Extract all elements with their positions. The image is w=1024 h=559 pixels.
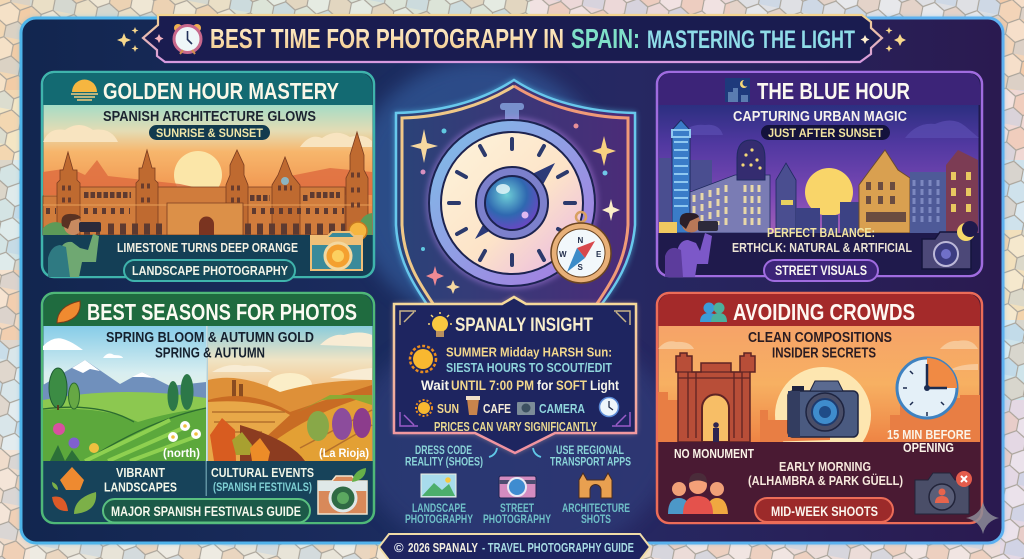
illustration: spring landscape bbox=[43, 326, 206, 461]
icon: compass: S bbox=[578, 263, 584, 272]
icon: compass: E bbox=[596, 250, 602, 259]
tag: mid-week shoots bbox=[755, 498, 893, 522]
icon row: CAFE bbox=[483, 401, 511, 416]
label: no monument: NO MONUMENT bbox=[674, 447, 754, 461]
subtitle: SPRING & AUTUMN bbox=[155, 346, 265, 362]
tag: landscape photography: LANDSCAPE PHOTOGRAPHY bbox=[132, 263, 288, 278]
tag: just after sunset: JUST AFTER SUNSET bbox=[768, 126, 884, 140]
subtitle: CAPTURING URBAN MAGIC bbox=[733, 109, 907, 125]
tip: regional transport: USE REGIONAL bbox=[556, 445, 624, 457]
subtitle bbox=[106, 330, 314, 362]
icon: right sparkles bbox=[860, 27, 906, 52]
band bbox=[44, 235, 372, 276]
heading: AVOIDING CROWDS bbox=[733, 299, 915, 325]
subtitle bbox=[748, 330, 892, 362]
icon: night skyline bbox=[725, 78, 750, 102]
text: wait until bbox=[421, 378, 619, 393]
header band bbox=[658, 294, 980, 326]
icon row: CAMERA bbox=[539, 401, 585, 416]
icon: large camera bbox=[788, 381, 858, 437]
illustration: triumphal arch bbox=[676, 353, 755, 442]
header band bbox=[44, 294, 372, 326]
title banner: SPAIN: bbox=[571, 23, 640, 54]
title text: BEST TIME FOR PHOTOGRAPHY IN bbox=[210, 23, 564, 54]
corner ornaments bbox=[400, 311, 630, 426]
icon: grey sparkle bbox=[966, 502, 999, 534]
header band bbox=[44, 73, 372, 105]
icon: camera with leaf bbox=[318, 468, 367, 514]
label: street photography: PHOTOGRAPHY bbox=[483, 514, 551, 526]
panel: avoiding crowds bbox=[657, 293, 999, 534]
icon: compass bbox=[551, 212, 611, 283]
icon: left sparkles bbox=[117, 27, 164, 52]
icon: photographer bbox=[48, 214, 101, 277]
caption: perfect balance: ERTHCLK: NATURAL & ARTIFICIAL bbox=[732, 241, 912, 255]
footer plaque: - TRAVEL PHOTOGRAPHY GUIDE bbox=[482, 540, 634, 555]
tag: mid-week shoots: MID-WEEK SHOOTS bbox=[771, 504, 878, 519]
illustration: city at dusk bbox=[658, 105, 979, 233]
icon: setting sun bbox=[71, 79, 98, 100]
caption: perfect balance bbox=[732, 226, 912, 255]
text: wait until: for bbox=[537, 378, 554, 393]
panel: best seasons for photos bbox=[42, 293, 374, 523]
label: street photography bbox=[483, 503, 551, 526]
icon: clock fifteen minutes bbox=[897, 358, 957, 418]
icon: group of people bbox=[668, 473, 728, 514]
title banner bbox=[117, 15, 906, 62]
tag: festivals guide: MAJOR SPANISH FESTIVALS GUIDE bbox=[111, 504, 301, 519]
text: prices: PRICES CAN VARY SIGNIFICANTLY bbox=[434, 420, 598, 434]
caption: LIMESTONE TURNS DEEP ORANGE bbox=[117, 240, 298, 255]
tag: street visuals: STREET VISUALS bbox=[775, 263, 867, 278]
illustration: palace at sunset bbox=[43, 105, 372, 235]
icon row bbox=[416, 396, 618, 416]
subtitle: CLEAN COMPOSITIONS bbox=[748, 330, 892, 346]
icon row: SUN bbox=[437, 401, 459, 416]
tag: sunrise and sunset: SUNRISE & SUNSET bbox=[156, 126, 264, 140]
icon: sun bbox=[410, 346, 436, 372]
text: early morning: EARLY MORNING bbox=[779, 460, 871, 474]
text: siesta hours: SIESTA HOURS TO SCOUT/EDIT bbox=[446, 360, 612, 375]
text: early morning bbox=[748, 460, 903, 488]
text: summer midday: SUMMER Midday HARSH Sun: bbox=[446, 344, 612, 360]
label: 15 min before opening: 15 MIN BEFORE bbox=[887, 427, 971, 442]
footer plaque bbox=[379, 534, 650, 559]
icon: camera with moon bbox=[922, 221, 978, 269]
footer plaque: 2026 SPANALY bbox=[408, 540, 478, 555]
label: street photography: STREET bbox=[500, 503, 534, 515]
text: wait until: SOFT bbox=[556, 378, 588, 393]
icon: leaves bbox=[52, 467, 96, 514]
icon: two people bbox=[700, 302, 727, 322]
icon: architecture bbox=[579, 473, 612, 498]
band bbox=[658, 233, 980, 275]
text: cultural events bbox=[211, 465, 314, 494]
icon: photographer bbox=[665, 213, 718, 277]
header band bbox=[658, 73, 980, 105]
icon: compass: N bbox=[578, 236, 584, 245]
text: wait until: UNTIL 7:00 PM bbox=[451, 378, 534, 393]
text: vibrant landscapes bbox=[104, 465, 177, 494]
heading: BEST SEASONS FOR PHOTOS bbox=[87, 299, 357, 325]
icon: shield sparkles bbox=[410, 124, 620, 294]
icon: compass: W bbox=[559, 250, 567, 259]
text: wait until: Light bbox=[590, 378, 619, 393]
label: landscape photography: LANDSCAPE bbox=[412, 503, 466, 515]
subtitle: INSIDER SECRETS bbox=[772, 346, 876, 362]
tip: dress code: DRESS CODE bbox=[415, 445, 472, 457]
tag: festivals guide bbox=[103, 499, 310, 522]
title banner: MASTERING THE LIGHT bbox=[647, 26, 855, 54]
band bbox=[44, 461, 372, 522]
label: la rioja: (La Rioja) bbox=[319, 446, 369, 460]
tip: dress code bbox=[405, 445, 483, 468]
icon: alarm clock bbox=[174, 24, 201, 54]
tag: street visuals bbox=[764, 260, 878, 281]
text: wait until: Wait bbox=[421, 378, 449, 393]
label: architecture shots: ARCHITECTURE bbox=[562, 503, 630, 515]
panel: spanaly insight bbox=[394, 297, 636, 453]
label: 15 min before opening: OPENING bbox=[903, 440, 954, 455]
icon: stopwatch bbox=[426, 103, 598, 289]
icon: autumn leaf bbox=[57, 301, 80, 323]
subtitle: SPANISH ARCHITECTURE GLOWS bbox=[103, 109, 316, 125]
text: vibrant landscapes: LANDSCAPES bbox=[104, 480, 177, 494]
illustration: autumn landscape bbox=[208, 326, 372, 461]
label: architecture shots bbox=[562, 503, 630, 526]
heading: GOLDEN HOUR MASTERY bbox=[103, 78, 339, 104]
footer plaque: © bbox=[394, 540, 404, 555]
icon: camera crossed bbox=[915, 471, 972, 514]
label: 15 min before opening bbox=[887, 427, 971, 455]
panel: golden hour mastery bbox=[42, 72, 374, 281]
label: landscape photography bbox=[405, 503, 473, 526]
text: cultural events: CULTURAL EVENTS bbox=[211, 465, 314, 480]
divider bbox=[206, 326, 208, 461]
band bbox=[658, 442, 980, 522]
subtitle: SPRING BLOOM & AUTUMN GOLD bbox=[106, 330, 314, 346]
text: vibrant landscapes: VIBRANT bbox=[116, 465, 165, 480]
arrow: right tip bbox=[533, 448, 541, 457]
label: north: (north) bbox=[163, 446, 200, 460]
label: architecture shots: SHOTS bbox=[581, 514, 611, 526]
panel: the blue hour bbox=[657, 72, 982, 281]
tip: regional transport: TRANSPORT APPS bbox=[550, 456, 631, 468]
heading: THE BLUE HOUR bbox=[757, 78, 910, 104]
tag: landscape photography bbox=[124, 260, 295, 281]
arrow: left tip bbox=[489, 448, 497, 457]
tip: regional transport bbox=[550, 445, 631, 468]
shield with stopwatch bbox=[394, 78, 636, 312]
illustration: sunset scene bbox=[658, 326, 980, 463]
text: early morning: (ALHAMBRA & PARK GÜELL) bbox=[748, 473, 903, 488]
tip: dress code: REALITY (SHOES) bbox=[405, 456, 483, 468]
icon: light bulb bbox=[428, 312, 452, 337]
icon: landscape photo bbox=[421, 474, 456, 497]
caption: perfect balance: PERFECT BALANCE: bbox=[767, 226, 875, 240]
text: cultural events: (SPANISH FESTIVALS) bbox=[213, 480, 312, 494]
heading: SPANALY INSIGHT bbox=[455, 314, 593, 336]
label: landscape photography: PHOTOGRAPHY bbox=[405, 514, 473, 526]
icon: camera with sun bbox=[311, 222, 367, 270]
icon: street camera bbox=[499, 476, 536, 498]
